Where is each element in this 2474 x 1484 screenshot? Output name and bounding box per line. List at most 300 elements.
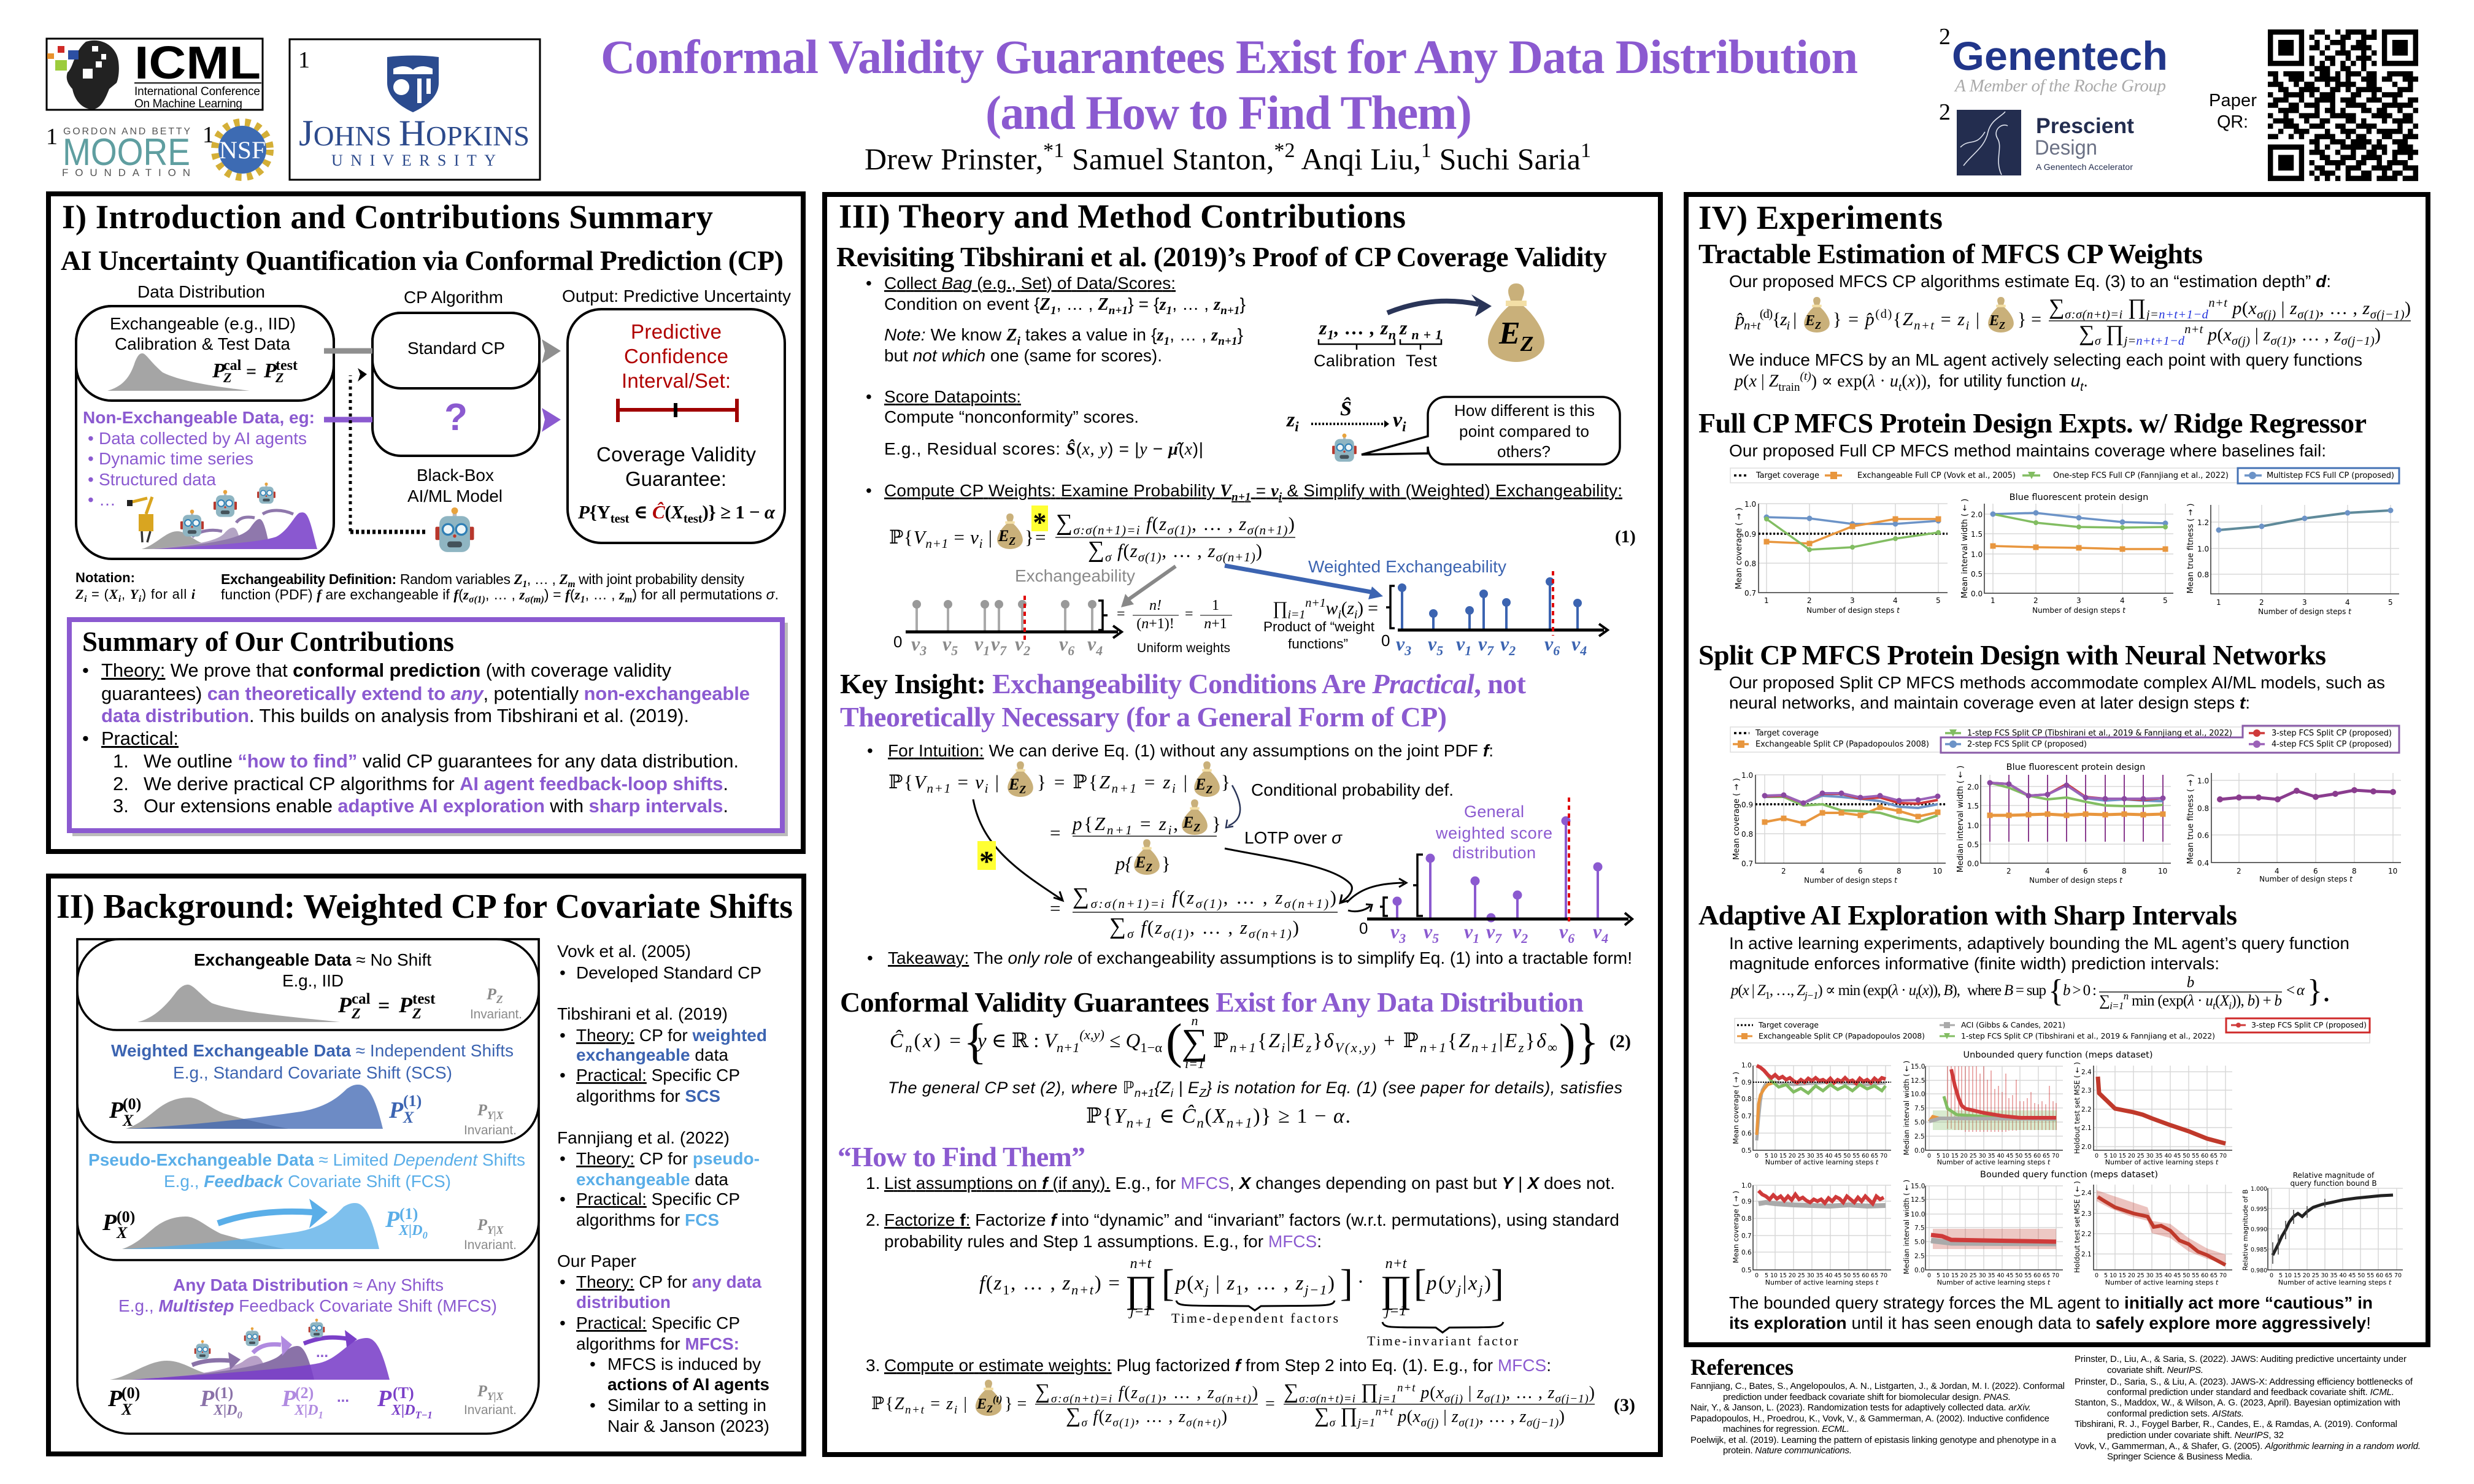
chart: bounded median interval width: 12.5 [1911, 1196, 1925, 1204]
arrows between boxes [324, 339, 561, 532]
chart: mean true fitness (full CP): 4 [2345, 598, 2350, 607]
chart: mean true fitness (split CP): Number of design steps t [2259, 875, 2353, 883]
factorization equation: ∏ [1380, 1269, 1412, 1310]
chart: mean true fitness (full CP): 1 [2216, 598, 2221, 607]
box: pseudo-exchangeable data [77, 939, 539, 1260]
literature notes column: Theory: CP for weighted [576, 1026, 767, 1045]
box: pseudo-exchangeable data: X [116, 1224, 128, 1242]
factorization equation: · [1357, 1271, 1364, 1293]
data distribution box: Structured data [99, 470, 216, 489]
steps: List assumptions on f (if any). E.g., for MFCS, X changes depending on past but Y | X does not. [884, 1174, 1615, 1193]
equation 2: ( [1166, 1015, 1182, 1069]
chart: general weighted score distribution: weighted score [1435, 824, 1552, 842]
text: query functions [1729, 350, 2362, 394]
chart: bounded holdout MSE: Number of active learning steps t [2105, 1278, 2219, 1286]
equation 2: ℙn+1{Zi|Ez}δV(x,y) [1213, 1030, 1376, 1055]
chart: median interval width (split CP): 1.0 [1967, 821, 1979, 830]
chart: mean true fitness (full CP): Number of design steps t [2258, 607, 2352, 616]
chart group title: bounded: Bounded query function (meps dataset) [1980, 1170, 2158, 1180]
chart: unbounded holdout MSE: 0 [2095, 1153, 2098, 1159]
equation 2: { [963, 1015, 987, 1069]
chart: mean true fitness (full CP): 2 [2259, 598, 2264, 607]
chart: unbounded mean coverage: 0.9 [1741, 1079, 1752, 1086]
logo: Johns Hopkins University: 1 [298, 47, 310, 73]
chart: bounded holdout MSE: 2.1 [2081, 1251, 2092, 1258]
column labels [137, 282, 791, 307]
chart: weighted lollipop: v6 [1544, 632, 1560, 658]
data distribution box: • [88, 429, 94, 448]
key insight heading [840, 668, 1527, 732]
bullets: collect bag: but not which one (same for scores). [884, 346, 1162, 365]
subheading: split CP: Split CP MFCS Protein Design with Neural Networks [1698, 639, 2326, 671]
logo: NSF: NSF [219, 136, 266, 164]
box: exchangeable data: test [412, 991, 436, 1007]
literature notes column: • [560, 1190, 566, 1209]
chart: bounded mean coverage: 0.8 [1741, 1215, 1752, 1223]
equation 1: } [1025, 526, 1034, 548]
output box: Interval/Set: [622, 369, 731, 392]
references: Papadopoulos, H., Proedrou, K., Vovk, V., & Gammerman, A. (2002). Inductive confidence [1690, 1413, 2049, 1424]
bullets: score datapoints [866, 387, 1203, 459]
icon: robot model [436, 507, 474, 552]
chart: weighted lollipop: v2 [1500, 632, 1516, 658]
derivation equations: p{ [1114, 853, 1133, 874]
chart: general weighted score distribution: v4 [1593, 920, 1608, 946]
chart: bounded mean coverage [1732, 1182, 1891, 1286]
chart: unbounded median interval width: 12.5 [1911, 1077, 1925, 1085]
score function diagram: zi [1286, 409, 1299, 435]
equation 1: = [1035, 526, 1046, 548]
chart: relative magnitude of B: Relative magnitude of B [2241, 1190, 2249, 1271]
chart: relative magnitude of B: 0.985 [2251, 1247, 2267, 1253]
chart: unbounded median interval width [1902, 1061, 2063, 1166]
box: any data distribution: X|DT−1 [391, 1402, 433, 1421]
box: weighted exchangeable data: (0) [123, 1095, 141, 1113]
notation [75, 570, 196, 604]
summary of contributions callout: Theory: We prove that conformal prediction (with coverage validity [101, 659, 671, 681]
output box: Confidence [624, 345, 728, 367]
logo: ICML: ICML [134, 37, 261, 88]
chart: mean coverage (split CP): 6 [1858, 867, 1863, 875]
literature notes column: actions of AI agents [607, 1375, 769, 1394]
references: Tibshirani, R. J., Foygel Barber, R., Candes, E., & Ramdas, A. (2019). Conformal [2075, 1419, 2397, 1429]
summary of contributions callout: 1. [113, 750, 129, 772]
text: full CP: Our proposed Full CP MFCS method maintains coverage where baselines fail: [1729, 441, 2326, 460]
chart: mean true fitness (full CP): 0.8 [2197, 571, 2209, 579]
calibration and test bag diagram [1314, 283, 1544, 370]
title: Conformal Validity Guarantees Exist for Any Data Distribution [601, 30, 1858, 83]
literature notes column: • [590, 1355, 596, 1374]
logo: Johns Hopkins University: JOHNS HOPKINS [299, 113, 530, 153]
chart: bounded mean coverage: 0.7 [1741, 1232, 1752, 1240]
chart: bounded holdout MSE: 2.2 [2081, 1231, 2092, 1238]
text: query functions: p(x | Ztrain(t)) ∝ exp(λ · ut(x)), [1733, 370, 1931, 394]
chart: mean coverage (full CP) [1735, 500, 1948, 615]
logo: Johns Hopkins University: UNIVERSITY [331, 152, 496, 169]
calibration and test bag diagram: z1, … , zn [1319, 317, 1396, 342]
text: query functions: for utility function ut. [1939, 371, 2088, 394]
chart: mean coverage (full CP): 2 [1807, 596, 1812, 605]
equation 2: y ∈ ℝ : Vn+1(x,y) ≤ Q1−α [976, 1027, 1162, 1055]
box: exchangeable data: cal [352, 991, 371, 1007]
chart: bounded median interval width: Median interval width ( ← ) [1902, 1180, 1911, 1274]
box: any data distribution: X|D0 [213, 1402, 242, 1421]
literature notes column [557, 942, 769, 1436]
logo: Prescient Design [1939, 99, 2134, 175]
text: active learning: In active learning experiments, adaptively bounding the ML agent’s query function [1729, 934, 2349, 953]
output box: Coverage Validity [596, 443, 756, 466]
references: conformal prediction sets. AIStats. [2107, 1409, 2244, 1419]
chart: unbounded mean coverage: Mean coverage ( → ) [1732, 1072, 1740, 1144]
equation 1: EZ [998, 527, 1015, 547]
chart: mean interval width (full CP): Number of design steps t [2032, 606, 2126, 615]
derivation equations: } = ℙ{Zn+1 = zi | [1037, 771, 1187, 796]
literature notes column: Fannjiang et al. (2022) [557, 1128, 730, 1147]
derivation equations [888, 761, 1454, 941]
subheading: adaptive AI exploration: Adaptive AI Exploration with Sharp Intervals [1698, 899, 2237, 931]
CP algorithm box: AI/ML Model [407, 486, 503, 506]
references: Fannjiang, C., Bates, S., Angelopoulos, A. N., Listgarten, J., & Jordan, M. I. (2022). Conformal [1690, 1381, 2065, 1391]
box: weighted exchangeable data: PY|X [477, 1101, 504, 1121]
chart: uniform weights lollipop: v3 [911, 632, 927, 658]
derivation equations: p{Zn+1 = zi, [1071, 813, 1178, 837]
chart: unbounded holdout MSE: Number of active learning steps t [2105, 1158, 2219, 1166]
panel III: theory and method contributions [825, 194, 1660, 1455]
chart: general weighted score distribution: v6 [1559, 920, 1574, 946]
chart: relative magnitude of B: 0 [2270, 1272, 2273, 1279]
literature notes column: exchangeable data [576, 1170, 728, 1189]
how to find them heading: “How to Find Them” [838, 1141, 1085, 1172]
data distribution box: … [99, 490, 116, 509]
chart: weighted lollipop: 0 [1381, 631, 1390, 650]
chart: uniform weights lollipop: v1 [974, 632, 990, 658]
box: pseudo-exchangeable data: Invariant. [464, 1238, 517, 1252]
chart: unbounded holdout MSE: 2.3 [2081, 1087, 2092, 1094]
legend: active learning: 1-step FCS Split CP (Tibshirani et al., 2019 & Fannjiang et al., 2022) [1961, 1031, 2215, 1040]
chart: general weighted score distribution: distribution [1452, 844, 1536, 862]
chart: uniform weights lollipop: n! [1149, 598, 1162, 613]
chart: bounded holdout MSE [2073, 1181, 2232, 1286]
chart title: Blue fluorescent protein design [2010, 493, 2148, 502]
literature notes column: MFCS is induced by [607, 1355, 761, 1374]
derivation equations: } [1162, 853, 1171, 874]
chart: general weighted score distribution: v1 [1464, 920, 1479, 946]
title [601, 30, 1858, 139]
chart: uniform weights lollipop: = [1185, 606, 1193, 622]
equation: estimated weights: EZ [1989, 313, 2005, 331]
literature notes column: Tibshirani et al. (2019) [557, 1004, 728, 1023]
references: Vovk, V., Gammerman, A., & Shafer, G. (2005). Algorithmic learning in a random world. [2075, 1441, 2421, 1451]
equation: estimated weights: } = p̂(d){Zn+t = zi | [1833, 307, 1979, 333]
box: weighted exchangeable data: P [109, 1098, 124, 1123]
legend: full CP: Multistep FCS Full CP (proposed) [2267, 471, 2394, 480]
subheading: full CP: Full CP MFCS Protein Design Expts. w/ Ridge Regressor [1698, 407, 2367, 439]
chart: mean coverage (full CP): 0.9 [1744, 530, 1756, 539]
interval icon [618, 399, 737, 422]
chart: median interval width (split CP): Number of design steps t [2029, 876, 2123, 885]
non-exchangeable density curves [142, 510, 317, 549]
box: exchangeable data: E.g., IID [282, 971, 344, 990]
data distribution box: test [276, 358, 298, 374]
equation: bounded query function: where B = sup [1967, 982, 2046, 999]
chart: mean interval width (full CP) [1960, 499, 2173, 615]
chart: mean true fitness (split CP): 6 [2313, 867, 2318, 875]
chart: unbounded holdout MSE: Holdout test set MSE ( ← ) [2073, 1062, 2081, 1154]
legend: active learning: Exchangeable Split CP (Papadopoulos 2008) [1759, 1031, 1925, 1040]
box: any data distribution [77, 939, 539, 1434]
chart: mean true fitness (split CP): 10 [2388, 867, 2397, 875]
box: pseudo-exchangeable data: E.g., Feedback Covariate Shift (FCS) [164, 1172, 451, 1191]
chart: uniform weights lollipop: v4 [1087, 632, 1103, 658]
chart: mean coverage (split CP): 0.8 [1741, 830, 1753, 839]
legend: full CP: Target coverage [1755, 471, 1819, 480]
references: Springer Science & Business Media. [2107, 1451, 2252, 1462]
derivation equations: = [1050, 898, 1060, 919]
paper QR label [2209, 91, 2257, 132]
chart: mean coverage (full CP): 4 [1893, 596, 1898, 605]
equation: bounded query function: { [2048, 974, 2064, 1009]
equation 3: ℙ{Zn+t = zi | [871, 1394, 967, 1417]
logo: NSF [202, 122, 270, 177]
chart: mean true fitness (full CP): Mean true fitness ( → ) [2186, 504, 2195, 593]
chart: mean coverage (full CP): 1 [1764, 596, 1769, 605]
derivation equations: ∑σ:σ(n+1)=i f(zσ(1), … , zσ(n+1)) [1073, 883, 1336, 911]
equation 2: n [1192, 1013, 1198, 1028]
summary of contributions callout: 2. [113, 773, 129, 794]
chart: bounded holdout MSE: 2.4 [2081, 1190, 2092, 1197]
chart: mean true fitness (split CP): 8 [2352, 867, 2357, 875]
chart: median interval width (split CP): 10 [2158, 867, 2167, 875]
chart: unbounded mean coverage: 0.6 [1741, 1130, 1752, 1137]
derivation equations: EZ [1008, 775, 1026, 796]
box: exchangeable data: Invariant. [470, 1007, 522, 1021]
chart title: Blue fluorescent protein design [2006, 763, 2145, 772]
column labels: Output: Predictive Uncertainty [562, 286, 791, 306]
score function diagram: vi [1393, 409, 1406, 435]
factorization equation: p(xj | z1, … , zj−1) [1174, 1272, 1335, 1298]
chart: unbounded median interval width: Number of active learning steps t [1937, 1158, 2051, 1166]
score function diagram: Ŝ [1340, 397, 1352, 420]
notation: Notation: [75, 570, 135, 585]
equation: bounded query function: }. [2307, 974, 2330, 1009]
chart: bounded median interval width: 7.5 [1914, 1224, 1925, 1232]
chart: mean true fitness (full CP): 3 [2302, 598, 2307, 607]
logo: ICML: On Machine Learning [134, 98, 242, 110]
chart: mean coverage (split CP): Number of design steps t [1804, 876, 1898, 885]
logo: Moore Foundation [46, 124, 190, 179]
chart: mean coverage (split CP) [1732, 771, 1946, 885]
chart: mean interval width (full CP): 3 [2076, 596, 2081, 605]
conformal validity heading: Conformal Validity Guarantees Exist for Any Data Distribution [840, 986, 1584, 1018]
summary of contributions callout: Our extensions enable adaptive AI exploration with sharp intervals. [144, 795, 728, 817]
chart: bounded mean coverage: 0 [1755, 1272, 1759, 1279]
equation 3: } = [1004, 1394, 1027, 1413]
text: active learning: magnitude enforces informative (finite width) prediction intervals: [1729, 954, 2219, 973]
chart: mean coverage (split CP): 4 [1820, 867, 1825, 875]
box: any data distribution: P [107, 1386, 123, 1412]
chart: unbounded holdout MSE [2073, 1062, 2232, 1166]
speech bubble: How different is this [1454, 401, 1595, 420]
chart: mean true fitness (split CP): 1.0 [2197, 777, 2209, 785]
derivation equations: ℙ{Vn+1 = vi | [888, 771, 999, 796]
bullets: score datapoints: Compute “nonconformity” scores. [884, 407, 1139, 426]
chart: bounded mean coverage: 5 10 15 20 25 30 35 40 45 50 55 60 65 70 [1765, 1272, 1887, 1279]
chart: unbounded median interval width: 5 10 15 20 25 30 35 40 45 50 55 60 65 70 [1936, 1153, 2059, 1159]
chart: mean true fitness (split CP): 0.6 [2197, 831, 2209, 840]
chart: relative magnitude of B [2241, 1171, 2403, 1286]
logo: ICML: International Conference [134, 85, 260, 98]
summary of contributions callout: guarantees) can theoretically extend to any, potentially non-exchangeable [101, 683, 750, 704]
chart: mean interval width (full CP): 1 [1990, 596, 1995, 605]
summary of contributions callout: We derive practical CP algorithms for AI agent feedback-loop shifts. [144, 773, 728, 794]
data distribution box: Z [223, 370, 231, 385]
literature notes column: distribution [576, 1293, 671, 1312]
column labels: Data Distribution [137, 282, 265, 301]
derivation equations: } [1221, 771, 1230, 793]
equation 1: ∑σ:σ(n+1)=i f(zσ(1), … , zσ(n+1)) [1056, 510, 1295, 537]
equation: bounded query function: b > 0 : [2063, 982, 2097, 999]
bullets: collect bag: Collect Bag (e.g., Set) of Data/Scores: [884, 274, 1176, 293]
speech bubble: point compared to [1459, 422, 1589, 440]
text: split CP: neural networks, and maintain coverage even at later design steps t: [1729, 693, 2250, 712]
equation 2: + ℙn+1{Zn+1|Ez}δ∞ [1384, 1030, 1557, 1055]
chart: weighted lollipop: v3 [1396, 632, 1411, 658]
references: References [1690, 1355, 1794, 1380]
legend: full CP [1730, 468, 2399, 483]
equation 3: ∑σ ∏j=1n+t p(xσ(j) | zσ(1), … , zσ(j−1)) [1314, 1404, 1565, 1429]
CP algorithm box: Black-Box [417, 466, 494, 485]
derivation equations: } [1212, 813, 1221, 834]
literature notes column: • [560, 1066, 566, 1085]
summary of contributions callout: We outline “how to find” valid CP guarantees for any data distribution. [144, 750, 739, 772]
box: any data distribution: (1) [215, 1384, 233, 1402]
equation: bounded query function: p(x | Z1, …, Zj−1) ∝ min (exp(λ · ut(x)), B), [1730, 982, 1960, 1001]
notation: Zi = (Xi, Yi) for all i [75, 586, 196, 604]
chart group title: unbounded: Unbounded query function (meps dataset) [1963, 1050, 2153, 1060]
chart: uniform weights lollipop: Uniform weights [1137, 641, 1230, 655]
equation: estimated weights: p̂n+t(d){zi | [1734, 307, 1797, 333]
literature notes column: Theory: CP for any data [576, 1272, 761, 1291]
chart: weighted lollipop: v5 [1428, 632, 1443, 658]
chart: relative magnitude of B: Relative magnitude of [2293, 1171, 2375, 1180]
steps: 2. [866, 1210, 880, 1229]
chart: weighted lollipop: v7 [1478, 632, 1494, 658]
chart: mean coverage (split CP): 1.0 [1741, 771, 1753, 780]
box: exchangeable data: PZ [486, 985, 503, 1005]
icon: robot arm [127, 497, 153, 542]
literature notes column: • [560, 1313, 566, 1332]
chart: uniform weights lollipop: v6 [1059, 632, 1074, 658]
text: split CP [1729, 673, 2385, 712]
chart: mean interval width (full CP): 1.0 [1971, 550, 1983, 559]
text: query functions: We induce MFCS by an ML agent actively selecting each point with query functions [1729, 350, 2362, 369]
derivation equations: Conditional probability def. [1251, 780, 1454, 799]
column labels: CP Algorithm [404, 288, 503, 307]
statement after equation 2: The general CP set (2), where ℙn+1{Zi | EZ} is notation for Eq. (1) (see paper for details), satisfies [888, 1078, 1622, 1099]
title: (and How to Find Them) [985, 86, 1472, 139]
bullet: compute CP weights: • [866, 481, 872, 500]
chart: bounded median interval width: 15.0 [1911, 1183, 1925, 1190]
literature notes column: Nair & Janson (2023) [607, 1417, 769, 1436]
factorization equation: j=1 [1128, 1303, 1151, 1319]
chart: bounded holdout MSE: 5 10 15 20 25 30 35 40 45 50 55 60 65 70 [2104, 1272, 2227, 1279]
chart: general weighted score distribution: v2 [1513, 920, 1528, 946]
exchangeability arrows: Weighted Exchangeability [1308, 557, 1506, 576]
literature notes column: Similar to a setting in [607, 1396, 766, 1415]
box: weighted exchangeable data: P [388, 1098, 404, 1123]
literature notes column: Practical: Specific CP [576, 1313, 740, 1332]
literature notes column: Theory: CP for pseudo- [576, 1149, 760, 1168]
factorization equation: j=1 [1384, 1303, 1406, 1319]
steps: probability rules and Step 1 assumptions. E.g., for MFCS: [884, 1232, 1322, 1251]
chart: weighted lollipop: Product of “weight [1263, 619, 1375, 634]
box: any data distribution: ... [337, 1389, 349, 1405]
equation 3: ∑σ:σ(n+t)=i f(zσ(1), … , zσ(n+t)) [1035, 1380, 1258, 1405]
data distribution box: • [88, 470, 94, 489]
legend: split CP [1730, 726, 2399, 753]
chart: general weighted score distribution: General [1464, 802, 1524, 821]
chart: uniform weights lollipop: 0 [893, 632, 902, 651]
chart: unbounded median interval width: 7.5 [1914, 1105, 1925, 1112]
factorization equation: [ [1162, 1263, 1174, 1304]
chart: unbounded holdout MSE: 2.2 [2081, 1106, 2092, 1113]
box: any data distribution: X [121, 1401, 133, 1418]
chart: bounded mean coverage: 0.5 [1741, 1267, 1752, 1274]
chart: mean coverage (full CP): Mean coverage ( → ) [1735, 507, 1744, 590]
data distribution box: P [263, 359, 277, 382]
box: exchangeable data: = [378, 994, 390, 1017]
paper QR label: QR: [2217, 112, 2248, 132]
box: any data distribution: Invariant. [464, 1403, 517, 1417]
chart: mean interval width (full CP): 5 [2163, 596, 2168, 605]
equation 1 [889, 506, 1636, 564]
chart: general weighted score distribution [1347, 798, 1632, 946]
chart: mean true fitness (split CP): Mean true fitness ( → ) [2186, 774, 2195, 864]
chart: uniform weights lollipop: v5 [942, 632, 958, 658]
equation: estimated weights: ∑σ ∏j=n+t+1−dn+t p(xσ(j) | zσ(1), … , zσ(j−1)) [2079, 321, 2381, 348]
literature notes column: • [560, 1149, 566, 1168]
CP algorithm box: Standard CP [407, 339, 505, 358]
chart: unbounded holdout MSE: 2.4 [2081, 1069, 2092, 1076]
chart: unbounded median interval width: 15.0 [1911, 1063, 1925, 1071]
chart: mean true fitness (full CP): 5 [2388, 598, 2393, 607]
logo: Prescient Design: Design [2035, 136, 2097, 160]
derivation equations: LOTP over σ [1244, 828, 1343, 847]
equation: bounded query function [1730, 974, 2330, 1012]
chart: uniform weights lollipop: = [1117, 606, 1125, 622]
box: exchangeable data: P [398, 993, 413, 1017]
legend: split CP: Exchangeable Split CP (Papadopoulos 2008) [1755, 740, 1929, 749]
legend: active learning [1735, 1018, 2370, 1043]
equation 1: (1) [1615, 527, 1636, 547]
text: estimation depth: Our proposed MFCS CP algorithms estimate Eq. (3) to an “estimation depth” d: [1729, 272, 2331, 291]
chart: mean true fitness (full CP): 1.2 [2197, 518, 2209, 527]
derivation arrows [973, 785, 1352, 903]
references: Poelwijk, et al. (2019). Learning the pattern of epistasis linking genotype and phenotype in a [1690, 1435, 2057, 1445]
exchangeability definition: Exchangeability Definition: Random variables Z1, … , Zm with joint probability density [221, 571, 745, 590]
equation 2: i=1 [1185, 1056, 1204, 1071]
chart: uniform weights lollipop: (n+1)! [1136, 616, 1174, 632]
chart: mean coverage (full CP): 0.8 [1744, 559, 1756, 568]
speech bubble: others? [1497, 442, 1551, 461]
bullet: takeaway: • [867, 948, 873, 967]
calibration and test bag diagram: EZ [1498, 316, 1533, 356]
legend: full CP: One-step FCS Full CP (Fannjiang et al., 2022) [2053, 471, 2229, 480]
steps: 1. [866, 1174, 880, 1193]
factorization equation: ] [1340, 1263, 1353, 1304]
chart: unbounded holdout MSE: 5 10 15 20 25 30 35 40 45 50 55 60 65 70 [2104, 1153, 2227, 1159]
logo: Prescient Design: 2 [1939, 99, 1951, 125]
